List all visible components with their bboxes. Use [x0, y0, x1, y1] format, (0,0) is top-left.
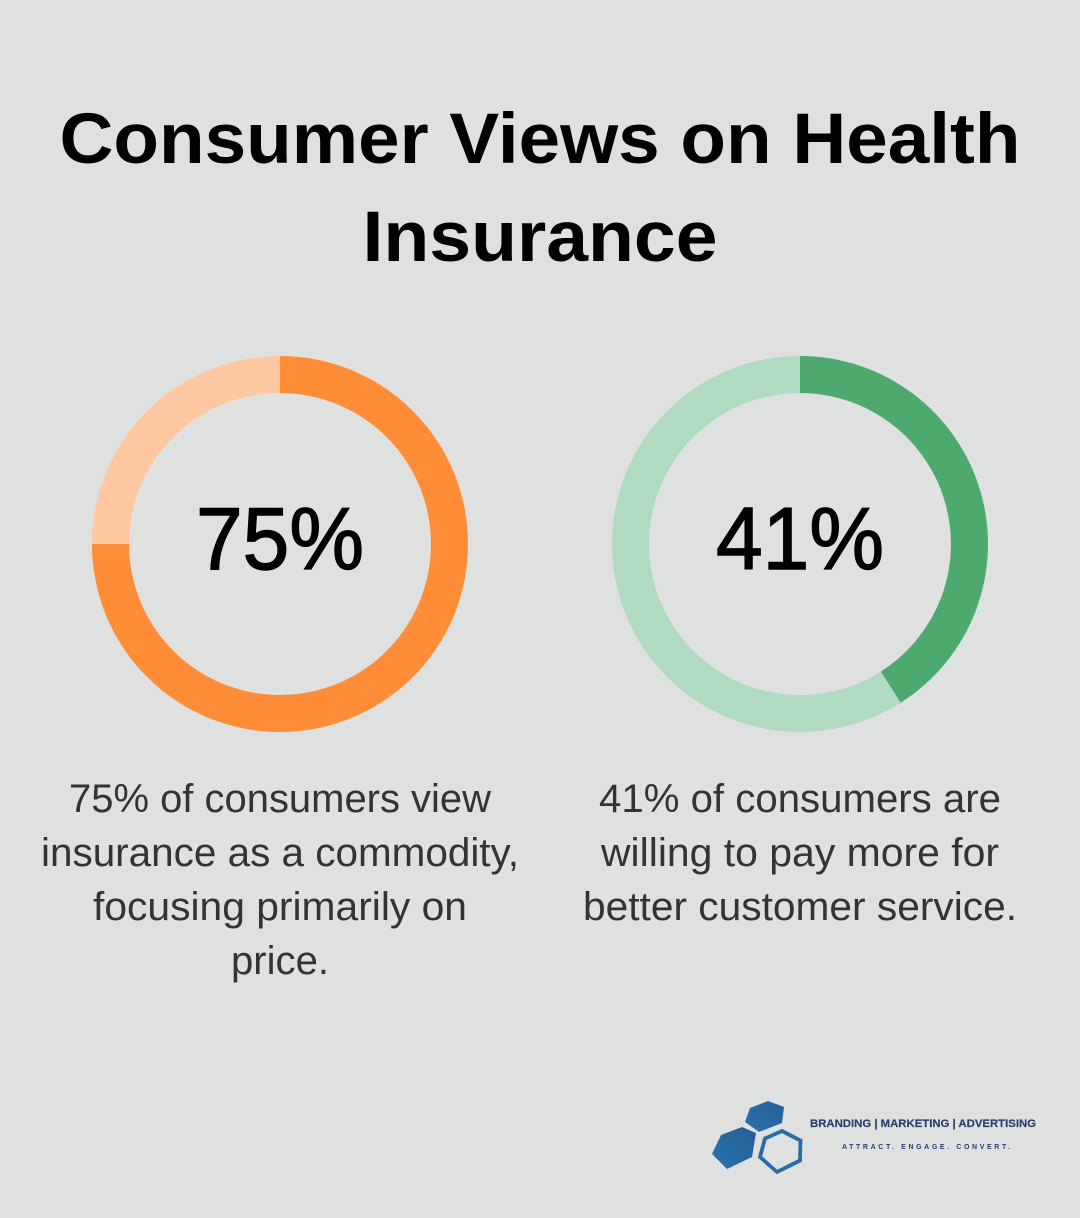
donut chart: 41%	[630, 374, 970, 714]
icon: solid top hexagon	[745, 1101, 784, 1132]
description: 41% of consumers: better customer service.	[583, 885, 1017, 929]
description: 75% of consumers	[41, 777, 519, 983]
title: Insurance	[362, 198, 718, 277]
description: 75% of consumers: focusing primarily on	[93, 885, 467, 929]
logo tagline: services: BRANDING | MARKETING | ADVERTISING	[810, 1118, 1036, 1130]
donut value: 75%: 75%	[196, 489, 364, 588]
description: 75% of consumers: price.	[231, 939, 329, 983]
description: 75% of consumers: 75% of consumers view	[69, 777, 491, 821]
title: Consumer Views on Health	[60, 100, 1020, 179]
description: 41% of consumers: willing to pay more for	[600, 831, 999, 875]
donut value: 41%: 41%	[716, 489, 884, 588]
panel: 41% customer service stat	[583, 374, 1017, 929]
icon: solid left hexagon	[712, 1127, 756, 1169]
description: 41% of consumers: 41% of consumers are	[599, 777, 1001, 821]
logo tagline: motto: ATTRACT. ENGAGE. CONVERT.	[842, 1144, 1010, 1151]
description: 41% of consumers	[583, 777, 1017, 929]
panel: 75% commodity stat	[41, 374, 519, 983]
icon: outlined hexagon	[760, 1131, 800, 1172]
donut chart: 75%	[110, 374, 450, 714]
title	[60, 100, 1020, 277]
description: 75% of consumers: insurance as a commodity,	[41, 831, 519, 875]
logo	[712, 1101, 1036, 1172]
